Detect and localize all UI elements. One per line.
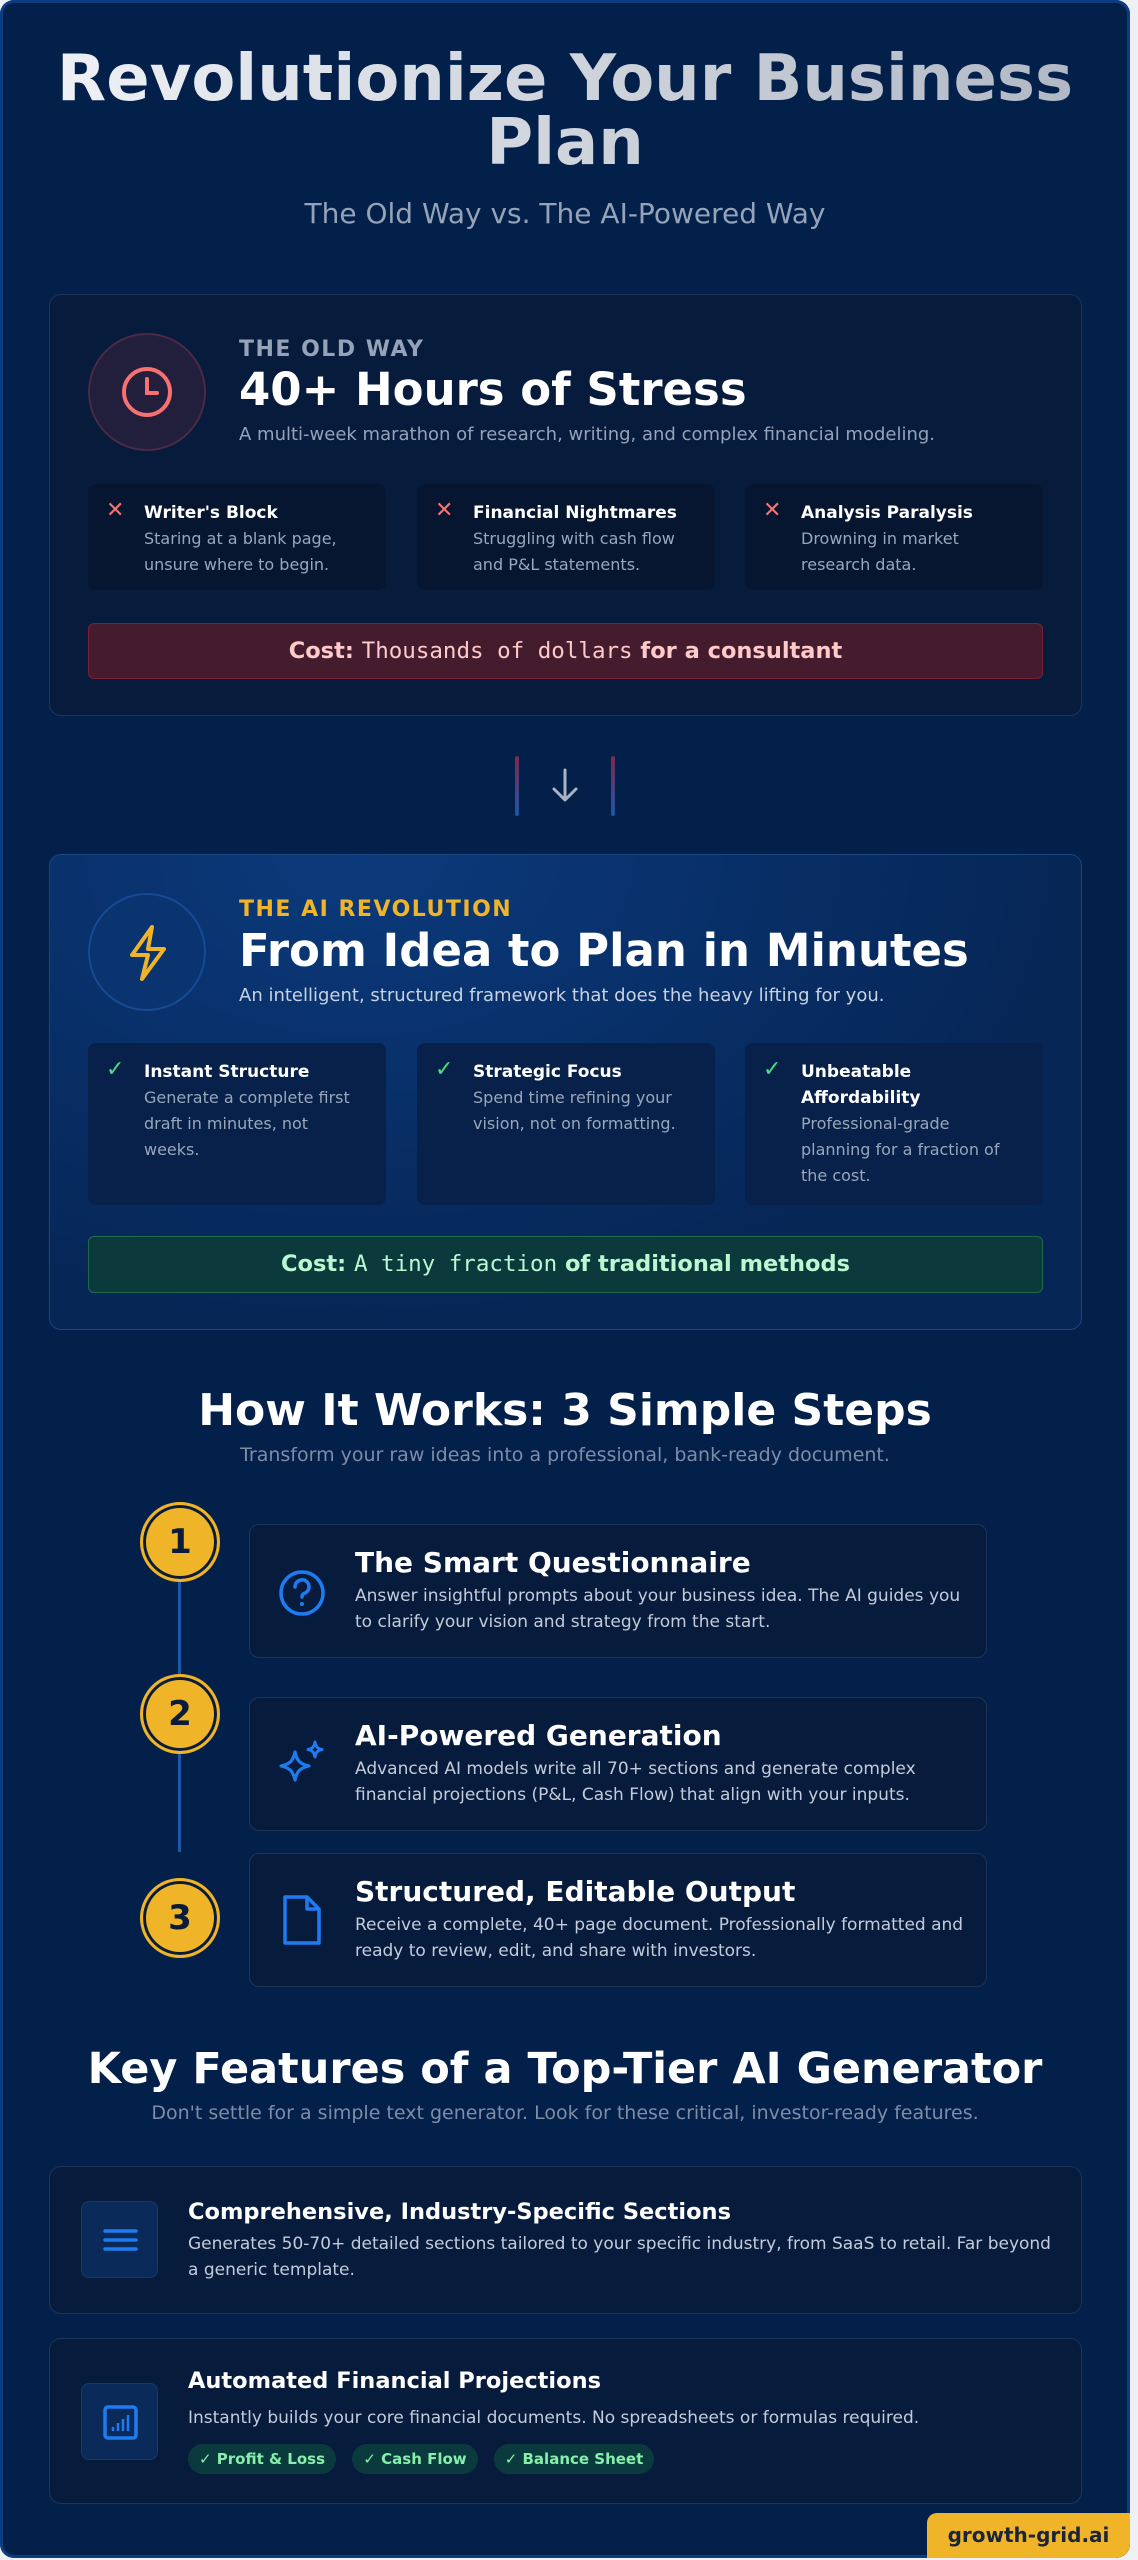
badge: brand	[927, 2513, 1130, 2558]
callout: cost: Cost: A tiny fraction of traditional methods	[281, 1251, 850, 1277]
step 2 card: Advanced AI models write all 70+ sections and generate complex financial projections (P&L, Cash Flow) that align with your inputs.	[355, 1759, 916, 1805]
callout: cost: Cost: Thousands of dollars for a consultant	[289, 638, 842, 664]
step number 3	[140, 1878, 220, 1958]
pills: ✓ Profit & Loss	[199, 2450, 325, 2468]
box: instant structure: ✓	[106, 1057, 124, 1082]
title: Plan	[486, 106, 644, 180]
box: affordability: Unbeatable Affordability	[801, 1062, 920, 1108]
heading: key features: Key Features of a Top-Tier AI Generator	[88, 2044, 1042, 2094]
icon: list	[81, 2201, 158, 2278]
panel: old way	[49, 294, 1082, 716]
feature card 2: Automated Financial Projections	[188, 2368, 601, 2394]
heading: From Idea to Plan in Minutes	[239, 924, 969, 977]
box: affordability: ✓	[763, 1057, 781, 1082]
step number 3: 3	[168, 1898, 192, 1938]
box: strategic focus: Spend time refining your vision, not on formatting.	[473, 1088, 676, 1133]
heading: how it works: How It Works: 3 Simple Steps	[198, 1385, 932, 1436]
box: analysis paralysis: Analysis Paralysis	[801, 503, 973, 523]
badge: brand: growth-grid.ai	[948, 2523, 1109, 2547]
icon: question	[279, 1570, 325, 1616]
icon: sparkles	[279, 1740, 324, 1782]
subheading: Don't settle for a simple text generator. Look for these critical, investor-ready features.	[151, 2102, 979, 2124]
box: analysis paralysis	[745, 484, 1043, 590]
box: affordability	[745, 1043, 1043, 1205]
feature card 1: Generates 50-70+ detailed sections tailored to your specific industry, from SaaS to retail. Far beyond a generic template.	[188, 2234, 1051, 2280]
feature card 2: Instantly builds your core financial documents. No spreadsheets or formulas required.	[188, 2408, 919, 2428]
description: An intelligent, structured framework that does the heavy lifting for you.	[239, 985, 884, 1006]
title	[0, 47, 1130, 175]
step 2 card: AI-Powered Generation	[355, 1719, 722, 1752]
box: writer's block: ✕	[106, 498, 124, 523]
box: instant structure	[88, 1043, 386, 1205]
timeline line	[178, 1580, 181, 1852]
title: Revolutionize Your Business	[57, 42, 1073, 116]
box: writer's block: Writer's Block	[144, 503, 278, 523]
step number 1	[140, 1502, 220, 1582]
box: strategic focus	[417, 1043, 715, 1205]
label: the ai revolution: THE AI REVOLUTION	[239, 897, 512, 922]
pills: ✓ Balance Sheet	[505, 2450, 643, 2468]
step 1 card	[249, 1524, 987, 1658]
icon: clock	[88, 333, 206, 451]
box: instant structure: Instant Structure	[144, 1062, 309, 1082]
feature card 1: Comprehensive, Industry-Specific Sections	[188, 2199, 731, 2225]
step number 2	[140, 1674, 220, 1754]
step number 1: 1	[168, 1522, 192, 1562]
panel: AI revolution	[49, 854, 1082, 1330]
box: financial nightmares: Struggling with cash flow and P&L statements.	[473, 529, 675, 574]
box: writer's block: Staring at a blank page, unsure where to begin.	[144, 529, 337, 574]
icon: chart	[81, 2383, 158, 2460]
step 1 card: Answer insightful prompts about your business idea. The AI guides you to clarify your vision and strategy from the start.	[355, 1586, 960, 1632]
description: A multi-week marathon of research, writing, and complex financial modeling.	[239, 424, 935, 445]
pills	[188, 2444, 654, 2474]
step 3 card: Receive a complete, 40+ page document. Professionally formatted and ready to review, edit, and share with investors.	[355, 1915, 963, 1961]
box: strategic focus: ✓	[435, 1057, 453, 1082]
callout: cost	[88, 1236, 1043, 1293]
feature card 2	[49, 2338, 1082, 2504]
box: analysis paralysis: ✕	[763, 498, 781, 523]
label: the old way: THE OLD WAY	[239, 337, 424, 362]
step 3 card: Structured, Editable Output	[355, 1875, 795, 1908]
step 2 card	[249, 1697, 987, 1831]
step number 2: 2	[168, 1694, 192, 1734]
step 1 card: The Smart Questionnaire	[355, 1546, 751, 1579]
callout: cost	[88, 623, 1043, 679]
box: instant structure: Generate a complete first draft in minutes, not weeks.	[144, 1088, 350, 1159]
arrow	[515, 756, 615, 816]
box: financial nightmares: ✕	[435, 498, 453, 523]
subheading: Transform your raw ideas into a professional, bank-ready document.	[240, 1444, 890, 1466]
step 3 card	[249, 1853, 987, 1987]
feature card 1	[49, 2166, 1082, 2314]
box: affordability: Professional-grade planning for a fraction of the cost.	[801, 1114, 999, 1185]
box: financial nightmares	[417, 484, 715, 590]
box: financial nightmares: Financial Nightmares	[473, 503, 677, 523]
icon: document	[283, 1895, 321, 1945]
heading: 40+ hours: 40+ Hours of Stress	[239, 363, 747, 416]
icon: lightning	[88, 893, 206, 1011]
box: strategic focus: Strategic Focus	[473, 1062, 622, 1082]
pills: ✓ Cash Flow	[363, 2450, 467, 2468]
box: analysis paralysis: Drowning in market research data.	[801, 529, 959, 574]
subtitle: The Old Way vs. The AI-Powered Way	[304, 197, 826, 230]
box: writer's block	[88, 484, 386, 590]
